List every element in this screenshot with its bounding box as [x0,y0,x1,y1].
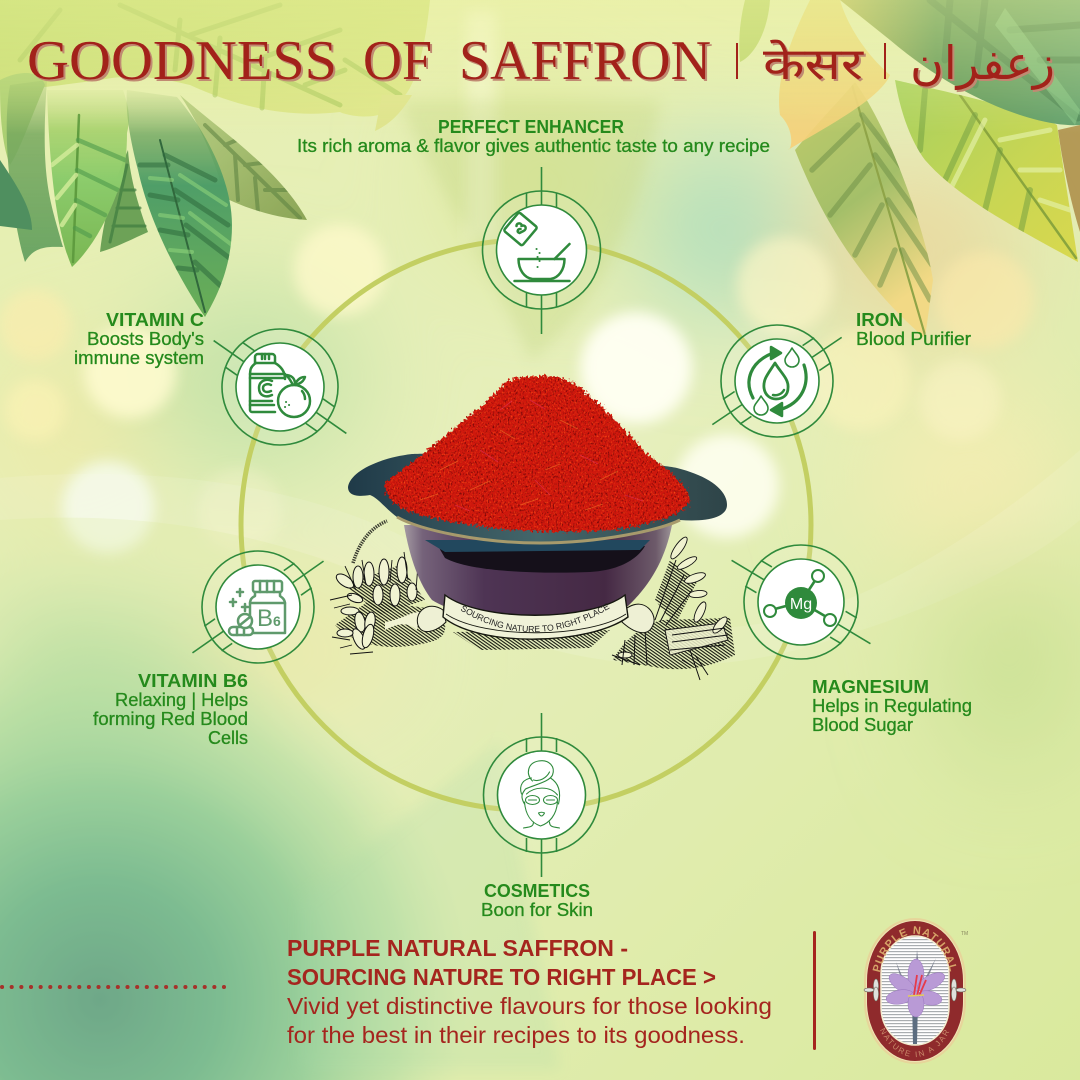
title: SAFFRON [459,30,711,92]
label: cosmetics [481,881,593,920]
leaves top right [739,0,1080,338]
logo: purple natural: TM [961,931,968,937]
label: magnesium: Blood Sugar [812,715,913,735]
icon: magnesium [702,511,900,693]
label: perfect enhancer: Its rich aroma & flavor gives authentic taste to any recipe [297,136,770,156]
label: vitamin c: Boosts Body's [87,329,204,349]
label: perfect enhancer: PERFECT ENHANCER [438,117,624,137]
label: vitamin b6: Relaxing | Helps [115,690,248,710]
headline: purple natural saffron: Vivid yet distinctive flavours for those looking [287,993,772,1019]
icon: magnesium: Mg [790,596,812,613]
label: magnesium: MAGNESIUM [812,677,929,697]
headline: purple natural saffron: for the best in their recipes to its goodness. [287,1022,745,1048]
label: vitamin b6: VITAMIN B6 [138,671,248,691]
title: केसर [763,39,864,89]
label: vitamin b6 [93,671,248,748]
icon: vitamin b6: B [257,605,273,632]
label: cosmetics: Boon for Skin [481,900,593,920]
top haze [0,0,1080,135]
illustration: bowl [348,454,727,621]
big ring [241,240,811,810]
leaves top left [0,0,430,317]
label: iron [856,310,971,349]
label: cosmetics: COSMETICS [484,881,590,901]
headline: purple natural saffron: SOURCING NATURE TO RIGHT PLACE > [287,964,716,990]
label: magnesium [812,677,972,735]
illustration: ribbon banner [377,555,694,670]
illustration: saffron pile [385,376,690,532]
dotted line [2,985,224,989]
title: زعفران [910,36,1055,91]
label: perfect enhancer [297,117,770,156]
illustration: engraved plants [330,521,735,680]
title: زعفران [912,38,1057,93]
title: GOODNESS [29,32,339,94]
title: SAFFRON [461,32,713,94]
icon: perfect enhancer [482,167,600,334]
icon: vitamin b6 [160,515,356,699]
title: OF [363,30,432,92]
icon: cosmetics [484,713,600,877]
illustration: ribbon banner: SOURCING NATURE TO RIGHT PLACE [461,603,610,632]
label: vitamin c: immune system [74,348,204,368]
title: GOODNESS [27,30,337,92]
label: vitamin c: VITAMIN C [106,310,204,330]
headline: purple natural saffron: PURPLE NATURAL SAFFRON - [287,935,628,961]
headline: purple natural saffron [287,935,772,1048]
icon: iron [681,291,873,471]
icon: vitamin c [180,293,380,481]
label: magnesium: Helps in Regulating [812,696,972,716]
label: vitamin b6: Cells [208,728,248,748]
logo: purple natural: NATURE IN A JAR [880,1028,950,1058]
title: केसर [765,41,866,91]
label: vitamin c [74,310,204,368]
logo: purple natural: PURPLE NATURAL [872,926,956,972]
title: OF [365,32,434,94]
title [27,30,1057,94]
label: iron: IRON [856,310,903,330]
icon: vitamin b6: 6 [273,613,281,629]
label: vitamin b6: forming Red Blood [93,709,248,729]
logo: purple natural [864,918,968,1064]
divider line [813,931,816,1050]
label: iron: Blood Purifier [856,329,971,349]
